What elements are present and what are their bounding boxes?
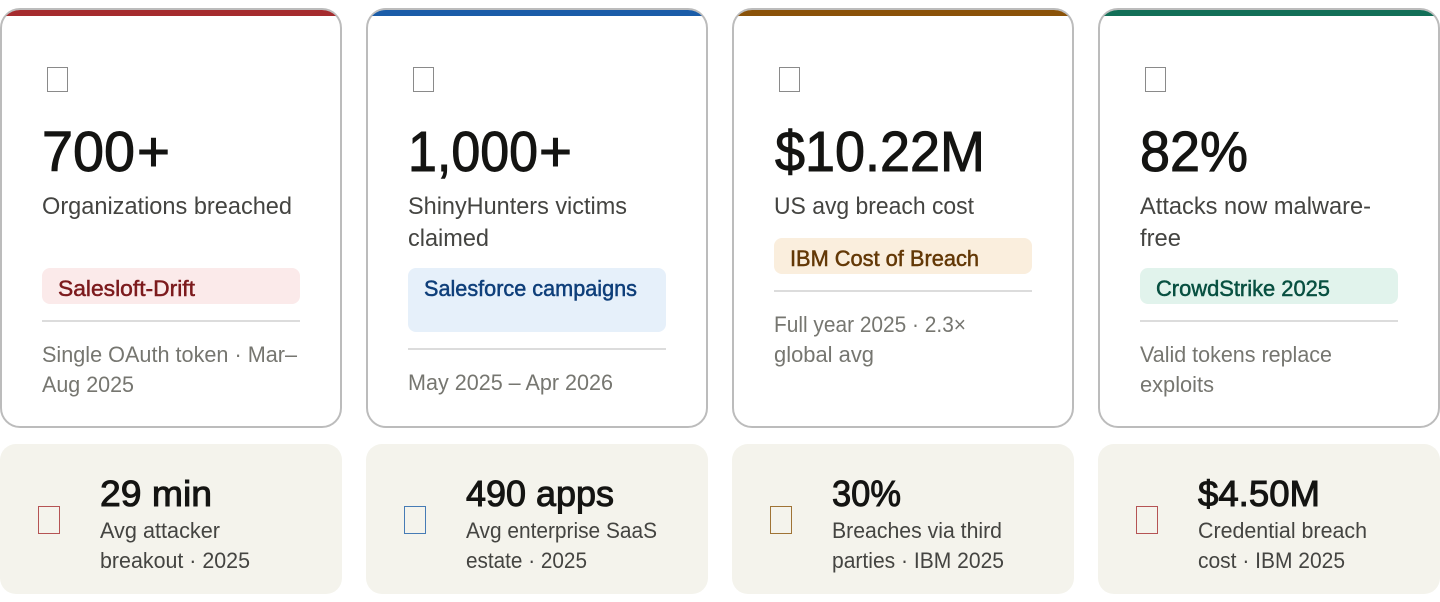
badge: IBM Cost of Breach [774,238,1032,274]
panel: Salesloft-Drift organizations breached [1,9,341,427]
panel: malware-free attacks [1099,9,1439,427]
caption: credential breach cost: cost · IBM 2025 [1198,548,1345,573]
icon: missing glyph blue [404,506,426,534]
caption: breaches via third parties: Breaches via third [832,518,1002,543]
badge: Salesloft-Drift [42,268,300,304]
note: single OAuth token: Single OAuth token · Mar– [42,342,298,367]
panel: US average breach cost [733,9,1073,427]
panel: third-party breaches [732,444,1074,594]
icon: missing glyph red [38,506,60,534]
label: ShinyHunters victims claimed: claimed [408,225,489,252]
panel: attacker breakout [0,444,342,594]
badge: Salesloft-Drift: Salesloft-Drift [58,276,195,301]
note: valid tokens replace exploits: exploits [1140,372,1214,397]
note: full year 2025: global avg [774,342,874,367]
label: attacks now malware-free: free [1140,225,1181,252]
big number: $10.22M: $10.22M [775,120,985,184]
big number: 1,000+: 1,000 [408,120,538,184]
badge: IBM Cost of Breach: IBM Cost of Breach [790,246,979,271]
caption: avg enterprise SaaS estate: estate · 2025 [466,548,587,573]
badge: Salesforce campaigns: Salesforce campaigns [424,276,637,301]
big number: 700+: 700 [42,120,135,184]
badge: CrowdStrike 2025 [1140,268,1398,304]
panel: credential breach cost [1098,444,1440,594]
caption: credential breach cost: Credential breach [1198,518,1367,543]
icon: missing glyph [1146,68,1166,92]
value: 29 min: 29 min [100,473,212,514]
icon: missing glyph amber [770,506,792,534]
caption: avg enterprise SaaS estate: Avg enterprise SaaS [466,518,657,543]
label: organizations breached: Organizations breached [42,193,292,220]
caption: avg attacker breakout: Avg attacker [100,518,220,543]
label: ShinyHunters victims claimed: ShinyHunters victims [408,193,627,220]
value: 490 apps: 490 apps [466,473,614,514]
label: attacks now malware-free: Attacks now malware- [1140,193,1371,220]
panel: SaaS estate [366,444,708,594]
note: single OAuth token: Aug 2025 [42,372,134,397]
note: valid tokens replace exploits: Valid tokens replace [1140,342,1332,367]
icon: missing glyph [414,68,434,92]
big number: 82%: 82% [1140,120,1248,184]
note: full year 2025: Full year 2025 · 2.3× [774,312,966,337]
badge: CrowdStrike 2025: CrowdStrike 2025 [1156,276,1330,301]
badge: Salesforce campaigns [408,268,666,332]
icon: missing glyph [48,68,68,92]
value: 30%: 30% [832,473,901,514]
panel: ShinyHunters victims claimed [367,9,707,427]
caption: avg attacker breakout: breakout · 2025 [100,548,250,573]
value: $4.50M: $4.50M [1198,473,1320,514]
caption: breaches via third parties: parties · IBM 2025 [832,548,1004,573]
icon: missing glyph [780,68,800,92]
icon: missing glyph red [1136,506,1158,534]
big number: 700+: + [137,120,170,184]
note: date range: May 2025 – Apr 2026 [408,370,613,395]
big number: 1,000+: + [539,120,572,184]
label: US avg breach cost: US avg breach cost [774,193,974,220]
